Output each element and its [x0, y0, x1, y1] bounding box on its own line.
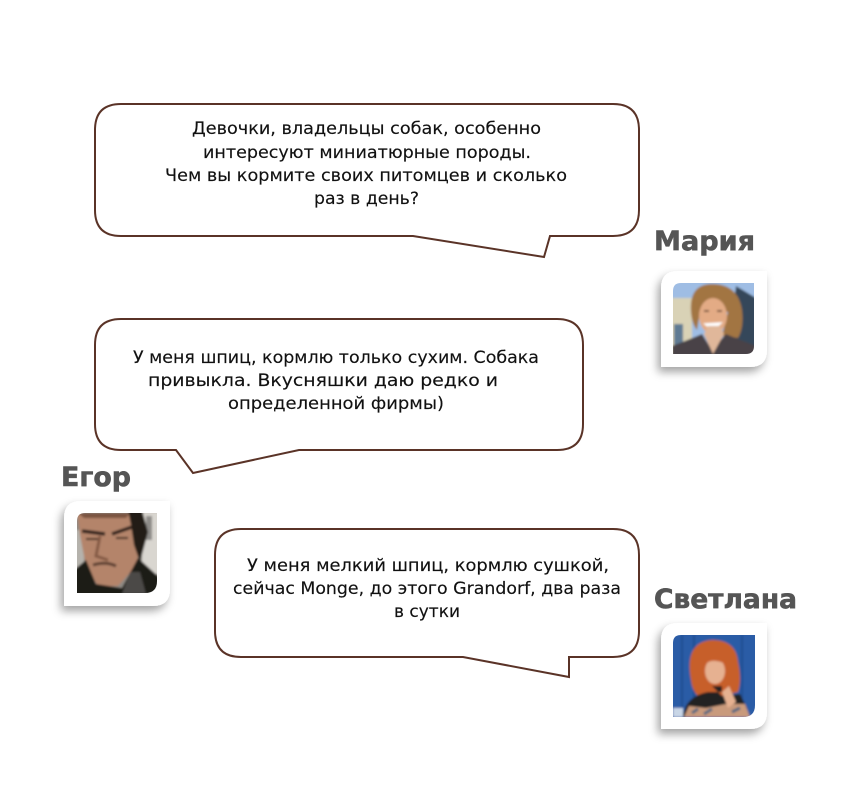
- text: вопрос Марии: раз в день?: [314, 189, 419, 209]
- avatar: Егор: [64, 501, 170, 606]
- name: Егор: Егор: [61, 462, 131, 493]
- text: ответ Егора: [133, 348, 539, 414]
- name: Мария: Мария: [654, 226, 755, 257]
- avatar: Светлана: [661, 623, 767, 729]
- speech bubble: Мария: [95, 104, 639, 257]
- name: Светлана: Светлана: [654, 584, 797, 615]
- text: вопрос Марии: интересуют миниатюрные породы.: [203, 143, 531, 163]
- text: ответ Светланы: У меня мелкий шпиц, кормлю сушкой,: [247, 556, 609, 576]
- avatar: Мария: [661, 271, 767, 367]
- text: ответ Егора: У меня шпиц, кормлю только сухим. Собака: [133, 348, 539, 368]
- text: вопрос Марии: [165, 119, 567, 209]
- speech bubble: Светлана: [215, 529, 639, 677]
- speech bubble: Егор: [95, 319, 583, 473]
- text: ответ Светланы: в сутки: [394, 602, 460, 622]
- text: вопрос Марии: Чем вы кормите своих питомцев и сколько: [165, 166, 567, 186]
- text: ответ Светланы: сейчас Monge, до этого Grandorf, два раза: [233, 579, 621, 599]
- text: ответ Егора: привыкла. Вкусняшки даю редко и: [148, 371, 498, 391]
- text: ответ Егора: определенной фирмы): [228, 394, 444, 414]
- text: вопрос Марии: Девочки, владельцы собак, особенно: [192, 119, 541, 139]
- text: ответ Светланы: [233, 556, 621, 622]
